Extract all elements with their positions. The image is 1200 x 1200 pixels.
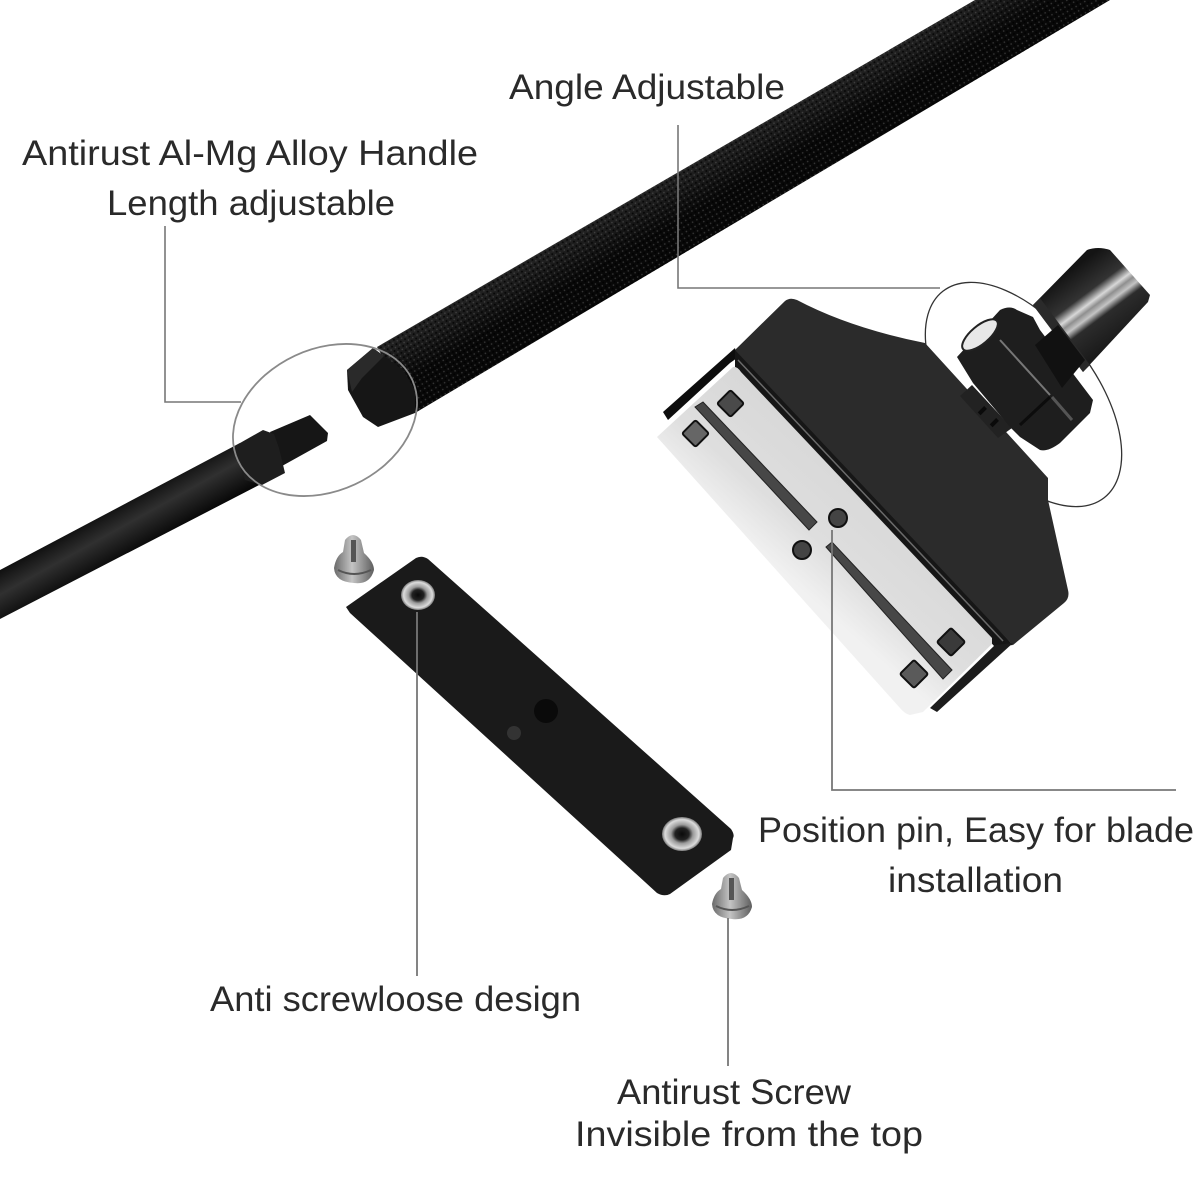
blade pin holes xyxy=(793,509,847,559)
head dark body xyxy=(735,299,1068,645)
ledge between blade and body xyxy=(735,350,1013,647)
label: anti screwloose: Anti screwloose design xyxy=(210,980,581,1019)
countersunk hole bottom xyxy=(662,817,702,851)
label: position pin: Position pin, Easy for blade xyxy=(758,811,1194,850)
lower dark edge xyxy=(930,643,1013,712)
label: position pin: installation xyxy=(888,861,1063,900)
screw top left xyxy=(334,535,374,583)
callout circle: angle joint xyxy=(887,248,1160,541)
cylinder base band xyxy=(1033,298,1090,372)
leader line: handle xyxy=(165,226,241,402)
blade slot 2 xyxy=(826,542,952,679)
angle adjustment knob xyxy=(957,248,1150,450)
blade slot 1 xyxy=(695,402,817,530)
label: antirust screw: Antirust Screw xyxy=(617,1073,852,1112)
steel blade xyxy=(657,367,992,715)
label: antirust screw: Invisible from the top xyxy=(575,1115,923,1154)
lower handle rod with thread xyxy=(0,415,328,619)
scraper head xyxy=(657,299,1068,715)
handle upper section xyxy=(347,0,1110,427)
leader line: screw xyxy=(727,918,729,1066)
handle end cap xyxy=(347,348,415,427)
label: position pin xyxy=(758,811,1194,900)
blade square holes xyxy=(682,390,965,688)
knob body xyxy=(957,308,1093,450)
mounting plate xyxy=(346,557,734,895)
leader line: screwloose xyxy=(416,612,418,976)
rod xyxy=(0,443,263,619)
cylinder xyxy=(1033,248,1150,372)
callout circle: handle joint xyxy=(208,315,442,525)
label: handle: Length adjustable xyxy=(107,184,395,223)
countersunk hole top xyxy=(401,580,435,610)
neck xyxy=(960,385,1012,438)
label: angle adjustable: Angle Adjustable xyxy=(509,68,785,107)
label: handle xyxy=(22,134,478,223)
leader line: position pin xyxy=(832,530,1176,790)
screw bottom right xyxy=(712,873,752,919)
knob end face xyxy=(957,314,1003,356)
thread xyxy=(270,415,328,466)
label: handle: Antirust Al-Mg Alloy Handle xyxy=(22,134,478,173)
pin holes xyxy=(534,699,558,723)
leader line: angle xyxy=(678,125,940,288)
collar xyxy=(233,430,285,485)
left dark strip xyxy=(663,348,737,420)
label: antirust screw xyxy=(575,1073,923,1154)
